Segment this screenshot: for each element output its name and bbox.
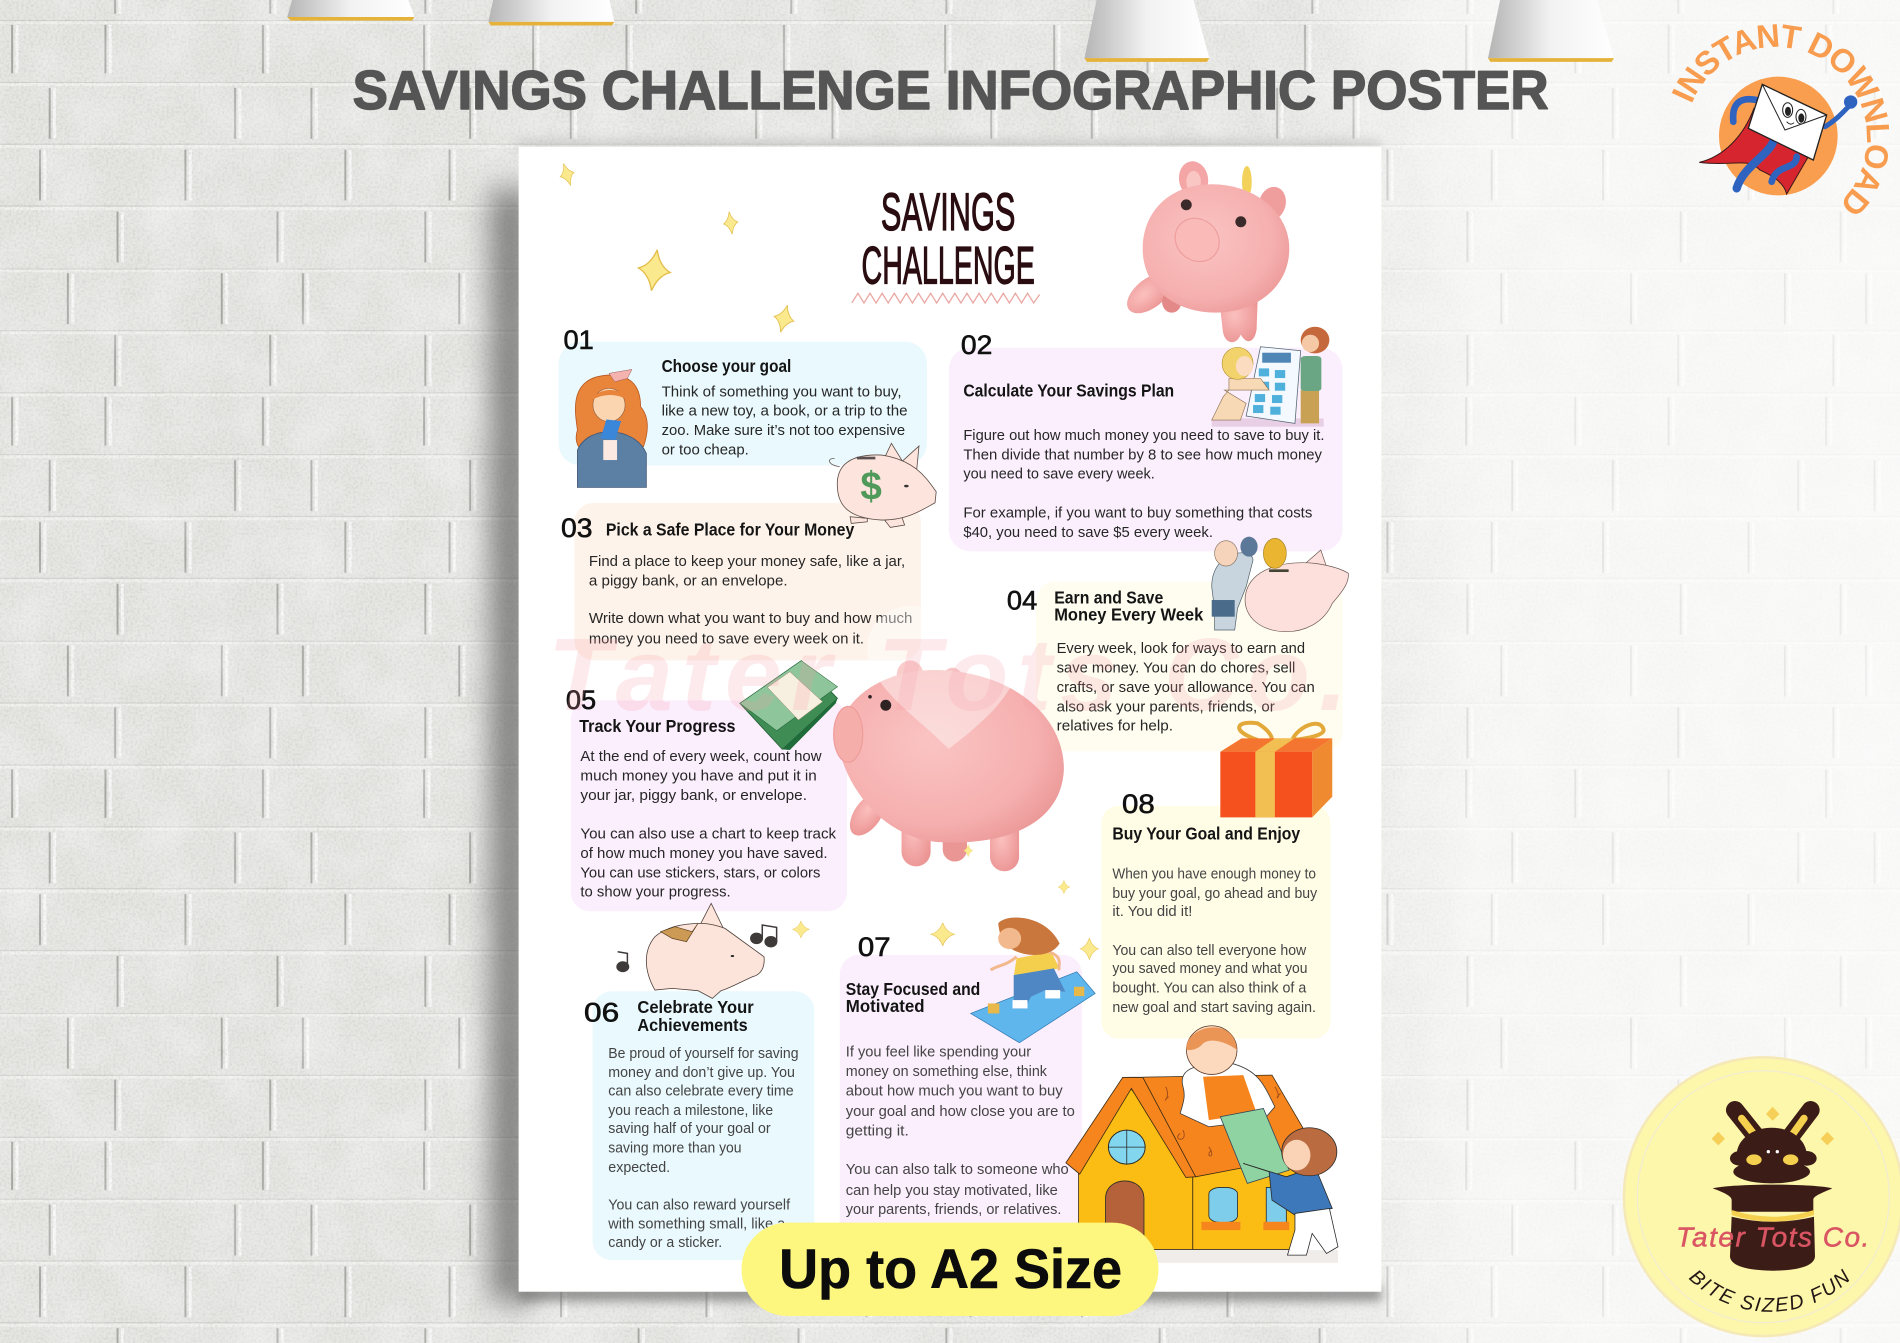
body 01: zoo. Make sure it’s not too expensive <box>662 422 905 439</box>
top boy body <box>1180 1063 1275 1127</box>
illustration: large 3d piggy bank <box>834 660 1064 871</box>
sparkles top-left <box>557 161 797 335</box>
body 02: Then divide that number by 8 to see how much money <box>963 446 1322 463</box>
illustration: house with kids <box>1066 1026 1338 1263</box>
heading 04: Money Every Week <box>1054 604 1203 624</box>
illustration: piggy bank with dollar sign: $ <box>860 465 882 508</box>
poster sheet <box>519 147 1381 1292</box>
body 06: can also celebrate every time <box>608 1083 794 1099</box>
watermark: Tater Tots Co. with heart: Tater Tots Co. <box>548 617 1347 732</box>
panel 02: calculate savings plan <box>949 330 1343 551</box>
icon: top 3d piggy bank <box>1120 159 1290 342</box>
heading 04 <box>1054 587 1203 624</box>
sparkles <box>1712 1107 1834 1145</box>
body 05: much money you have and put it in <box>580 767 817 784</box>
heading 05: Track Your Progress <box>579 716 736 736</box>
body 04: Every week, look for ways to earn and <box>1057 640 1305 657</box>
body 08: bought. You can also think of a <box>1112 980 1307 996</box>
body 04: relatives for help. <box>1057 718 1173 735</box>
illustration: stack of money <box>740 661 837 750</box>
wavy underline <box>852 293 1040 303</box>
body 04: also ask your parents, friends, or <box>1057 698 1275 715</box>
body 05 <box>580 748 837 901</box>
body 08: You can also tell everyone how <box>1112 943 1307 959</box>
body 03: money you need to save every week on it. <box>589 630 864 647</box>
body 07: money on something else, think <box>846 1064 1048 1080</box>
body 01 <box>662 383 908 458</box>
body 06: money and don’t give up. You <box>608 1065 795 1081</box>
panel 03 background <box>574 503 921 660</box>
body 04: save money. You can do chores, sell <box>1057 660 1295 677</box>
body 03: Write down what you want to buy and how much <box>589 610 912 627</box>
roof <box>1123 1075 1318 1177</box>
illustration: kid on bank card <box>971 917 1095 1043</box>
body 07: If you feel like spending your <box>846 1045 1031 1061</box>
body 07: your parents, friends, or relatives. <box>846 1202 1061 1218</box>
body 01: or too cheap. <box>662 441 749 458</box>
number 01: 01 <box>563 325 594 355</box>
body 07 <box>846 1045 1075 1218</box>
heading 07: Motivated <box>846 996 925 1016</box>
panel 04: earn and save <box>1007 582 1343 751</box>
body 06: expected. <box>608 1160 670 1176</box>
ground dots <box>1154 1250 1338 1263</box>
body 05: of how much money you have saved. <box>580 845 828 862</box>
sparkles lower <box>792 845 1099 960</box>
house walls <box>1079 1088 1193 1249</box>
panel 03: safe place <box>561 503 921 660</box>
body 05: your jar, piggy bank, or envelope. <box>580 787 807 804</box>
panel 04 background <box>1036 582 1343 751</box>
number 02: 02 <box>961 330 992 360</box>
heading 04: Earn and Save <box>1054 587 1163 607</box>
panel 06: celebrate achievements <box>584 991 814 1260</box>
number 06: 06 <box>584 998 619 1028</box>
body 01: Think of something you want to buy, <box>662 383 902 400</box>
badge arc text: INSTANT DOWNLOAD <box>1672 24 1890 214</box>
illustration: piggy bank with dollar sign <box>829 443 936 527</box>
round window <box>1108 1130 1145 1164</box>
illustration: kids with calculator <box>1212 327 1329 427</box>
number 04: 04 <box>1007 586 1037 616</box>
body 08: When you have enough money to <box>1112 867 1316 883</box>
body 04 <box>1057 640 1315 735</box>
body 08: it. You did it! <box>1112 904 1192 920</box>
heading 06: Celebrate Your <box>637 997 754 1017</box>
body 02: $40, you need to save $5 every week. <box>963 524 1213 541</box>
rabbit in hat <box>1713 1110 1832 1271</box>
body 03 <box>589 553 912 647</box>
body 02: Figure out how much money you need to save to buy it. <box>963 427 1324 444</box>
illustration: girl with phone <box>575 369 647 487</box>
panel 02 background <box>949 348 1343 551</box>
bottom boy <box>1243 1163 1332 1215</box>
panel 05: track progress <box>566 685 847 911</box>
body 03: a piggy bank, or an envelope. <box>589 572 788 589</box>
heading: poster title: SAVINGS CHALLENGE INFOGRAPHIC POSTER <box>353 60 1549 121</box>
heading 06 <box>637 997 754 1035</box>
door <box>1106 1181 1144 1249</box>
body 05: At the end of every week, count how <box>580 748 822 765</box>
body 06: candy or a sticker. <box>608 1235 722 1251</box>
poster title: SAVINGS <box>881 183 1015 242</box>
panel 08 background <box>1101 806 1330 1038</box>
body 02: you need to save every week. <box>963 466 1155 483</box>
panel 06 background <box>593 991 814 1260</box>
body 08: new goal and start saving again. <box>1112 1000 1316 1016</box>
body 05: to show your progress. <box>580 884 731 901</box>
number 03: 03 <box>561 513 593 543</box>
body 06 <box>607 1046 799 1251</box>
body 06: you reach a milestone, like <box>608 1103 773 1119</box>
heading 07 <box>846 979 980 1016</box>
body 07: about how much you want to buy <box>846 1083 1063 1099</box>
heading 02: Calculate Your Savings Plan <box>963 380 1174 400</box>
heading 06: Achievements <box>637 1015 748 1035</box>
illustration: gift box <box>1220 723 1332 817</box>
body 07: You can also talk to someone who <box>846 1162 1069 1178</box>
heading 01: Choose your goal <box>662 356 791 376</box>
number 05: 05 <box>566 685 596 715</box>
poster shadows <box>491 139 1381 1303</box>
body 06: with something small, like a <box>607 1217 786 1233</box>
panel 07 background <box>840 955 1082 1246</box>
number 08: 08 <box>1122 789 1155 819</box>
icon: flying envelope hero <box>1699 77 1857 195</box>
money note <box>1220 1108 1289 1183</box>
body 03: Find a place to keep your money safe, like a jar, <box>589 553 905 570</box>
illustration: kids and piggy bank <box>1212 537 1348 632</box>
logo: Tater Tots Co. <box>1622 1056 1900 1338</box>
panel 05 background <box>571 700 847 911</box>
badge: instant download <box>1672 24 1890 214</box>
poster title <box>862 183 1035 296</box>
body 05: You can use stickers, stars, or colors <box>580 864 820 881</box>
body 08 <box>1112 867 1318 1016</box>
body 01: like a new toy, a book, or a trip to the <box>662 403 908 420</box>
poster title: CHALLENGE <box>862 237 1035 296</box>
heading 03: Pick a Safe Place for Your Money <box>606 520 854 540</box>
panel 01 background <box>559 342 927 465</box>
body 02: For example, if you want to buy something that costs <box>963 504 1312 521</box>
panel 08: buy your goal <box>1101 789 1330 1038</box>
body 06: saving half of your goal or <box>608 1121 771 1137</box>
panel 07: stay focused <box>840 932 1082 1246</box>
body 07: can help you stay motivated, like <box>846 1183 1058 1199</box>
heading 08: Buy Your Goal and Enjoy <box>1112 824 1300 844</box>
callout: up to A2 size: Up to A2 Size <box>779 1238 1122 1300</box>
logo tagline: BITE SIZED FUN <box>1688 1268 1850 1312</box>
body 07: your goal and how close you are to <box>846 1104 1075 1120</box>
callout: up to A2 size <box>742 1223 1158 1316</box>
body 08: you saved money and what you <box>1112 961 1307 977</box>
top boy head <box>1186 1026 1237 1074</box>
body 06: saving more than you <box>608 1140 742 1156</box>
number 07: 07 <box>858 932 891 962</box>
illustration: piggy bank with coins and notes <box>617 903 777 998</box>
body 08: buy your goal, go ahead and buy <box>1112 886 1318 902</box>
body 02 <box>963 427 1324 541</box>
heading 07: Stay Focused and <box>846 979 980 999</box>
ceiling lamps <box>287 0 1614 62</box>
logo name: Tater Tots Co. <box>1676 1222 1869 1253</box>
windows <box>1209 1187 1238 1222</box>
body 05: You can also use a chart to keep track <box>580 826 837 843</box>
body 06: You can also reward yourself <box>608 1197 791 1213</box>
body 04: crafts, or save your allowance. You can <box>1057 679 1315 696</box>
body 07: getting it. <box>846 1123 909 1139</box>
panel 01: choose your goal <box>559 325 927 465</box>
body 06: Be proud of yourself for saving <box>608 1046 799 1062</box>
